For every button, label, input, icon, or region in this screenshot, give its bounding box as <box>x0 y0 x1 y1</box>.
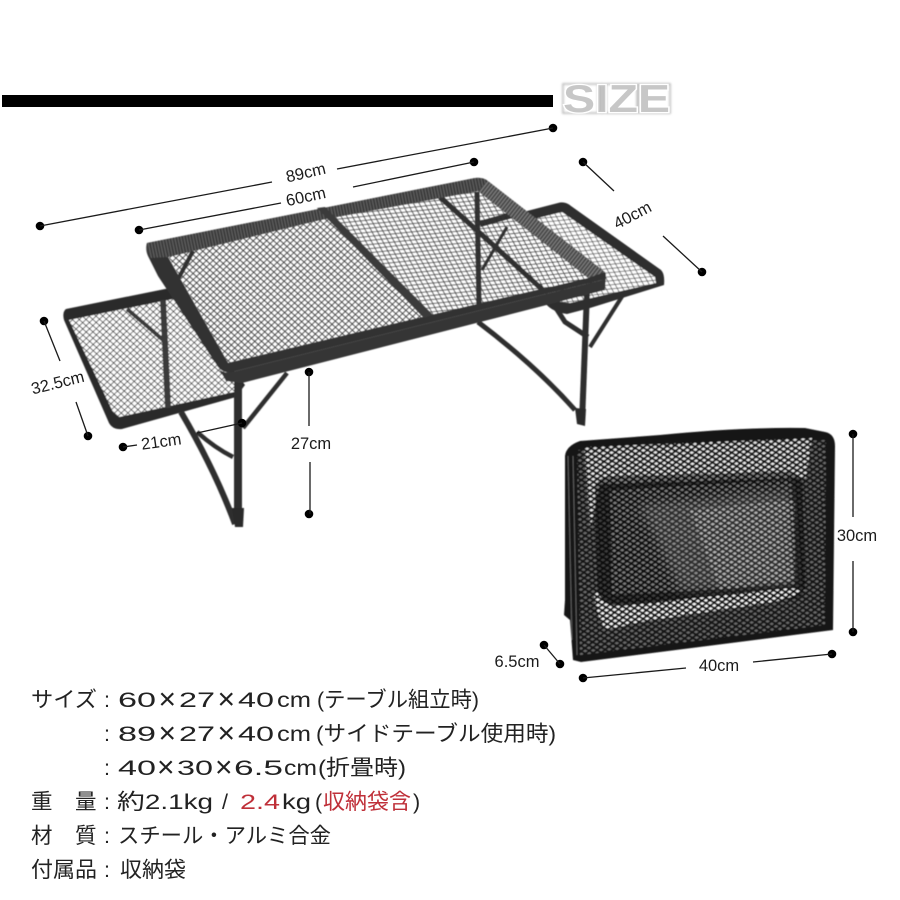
spec: size with side tables: cm <box>277 722 311 746</box>
spec: size folded: 40 <box>118 756 156 780</box>
spec: size assembled: 27 <box>179 688 215 712</box>
spec: weight: kg <box>282 790 311 814</box>
spec: size assembled: × <box>218 683 235 716</box>
right side table <box>500 202 664 314</box>
dimension: 32.5cm <box>29 317 92 440</box>
spec: material: 質 <box>75 824 97 848</box>
folded outer frame <box>564 428 835 662</box>
folded base mesh <box>577 440 826 655</box>
dimension: 21cm: 21cm <box>140 430 183 454</box>
spec: size with side tables: × <box>158 717 176 750</box>
folded lower crescent <box>594 588 805 630</box>
spec: size with side tables: : <box>104 722 110 746</box>
spec: size folded: : <box>104 756 110 780</box>
folded inner tray <box>594 471 806 605</box>
spec: weight: 量 <box>75 790 97 814</box>
spec: size folded: 30 <box>177 756 213 780</box>
spec: material: : <box>104 824 110 848</box>
spec: size folded: (折畳時) <box>318 756 406 780</box>
header bar <box>2 95 553 107</box>
spec: size folded: 6.5 <box>234 756 283 780</box>
dimension: 60cm: 60cm <box>284 184 328 210</box>
spec: accessories <box>31 858 186 882</box>
folded tray light patch <box>640 490 795 590</box>
spec: size with side tables: × <box>218 717 235 750</box>
folded top mesh <box>584 438 812 530</box>
spec: weight: 2.4 <box>240 790 280 814</box>
spec: weight: / <box>222 790 228 814</box>
spec: accessories: 付属品 <box>31 858 97 882</box>
spec: size assembled <box>31 683 479 716</box>
spec: size with side tables <box>104 717 556 750</box>
spec: size folded: × <box>215 751 233 784</box>
dimension: 21cm <box>119 419 246 454</box>
illustration: table with side tables <box>63 178 664 527</box>
spec: size assembled: : <box>104 688 110 712</box>
spec: size assembled: 60 <box>118 688 156 712</box>
spec: size assembled: cm <box>277 688 311 712</box>
dimension: 40cm folded: 40cm <box>699 657 739 675</box>
spec: size assembled: × <box>158 683 176 716</box>
dimension: 40cm right side: 40cm <box>611 198 655 233</box>
spec list <box>31 683 556 882</box>
spec: accessories: 収納袋 <box>120 858 186 882</box>
spec: weight <box>31 790 420 814</box>
dimension: 40cm folded <box>579 650 836 682</box>
spec: size with side tables: 89 <box>118 722 156 746</box>
spec: size assembled: (テーブル組立時) <box>317 688 479 712</box>
spec: weight: ) <box>413 790 420 814</box>
spec: size folded <box>104 751 406 784</box>
dimension: 27cm: 27cm <box>291 435 331 453</box>
illustration: folded table <box>564 428 835 662</box>
main table frame <box>146 178 606 383</box>
under-table braces <box>175 192 543 305</box>
spec: weight: 約2.1kg <box>117 790 213 814</box>
spec: size folded: × <box>157 751 175 784</box>
dimension: 30cm <box>837 430 877 636</box>
spec: size with side tables: 40 <box>238 722 274 746</box>
dimension: 89cm <box>36 124 557 230</box>
dimension: 40cm right side <box>579 158 706 276</box>
spec: material: スチール・アルミ合金 <box>118 824 331 848</box>
left legs <box>181 373 287 527</box>
spec: weight: : <box>104 790 110 814</box>
dimension: 6.5cm <box>495 641 564 671</box>
spec: weight: 収納袋含 <box>323 790 411 814</box>
spec: size assembled: 40 <box>238 688 274 712</box>
dimension: 89cm: 89cm <box>284 160 328 186</box>
dimension: 32.5cm: 32.5cm <box>29 368 86 398</box>
spec: material: 材 <box>31 824 53 848</box>
spec: size assembled: サイズ <box>31 688 97 712</box>
dimension: 30cm: 30cm <box>837 527 877 545</box>
spec: weight: ( <box>315 790 323 814</box>
spec: size folded: cm <box>284 756 317 780</box>
dimension: 60cm <box>135 158 478 234</box>
right legs <box>478 292 623 426</box>
spec: size with side tables: (サイドテーブル使用時) <box>316 722 556 746</box>
main table mesh <box>168 191 588 363</box>
dimension: 27cm <box>291 368 331 518</box>
heading: SIZE: SIZE <box>563 78 670 121</box>
spec: weight: 重 <box>31 790 53 814</box>
folded hinge strip <box>568 456 577 655</box>
spec: size with side tables: 27 <box>179 722 215 746</box>
left side table <box>63 288 245 429</box>
dimension: 6.5cm: 6.5cm <box>495 653 539 671</box>
spec: accessories: : <box>104 858 110 882</box>
